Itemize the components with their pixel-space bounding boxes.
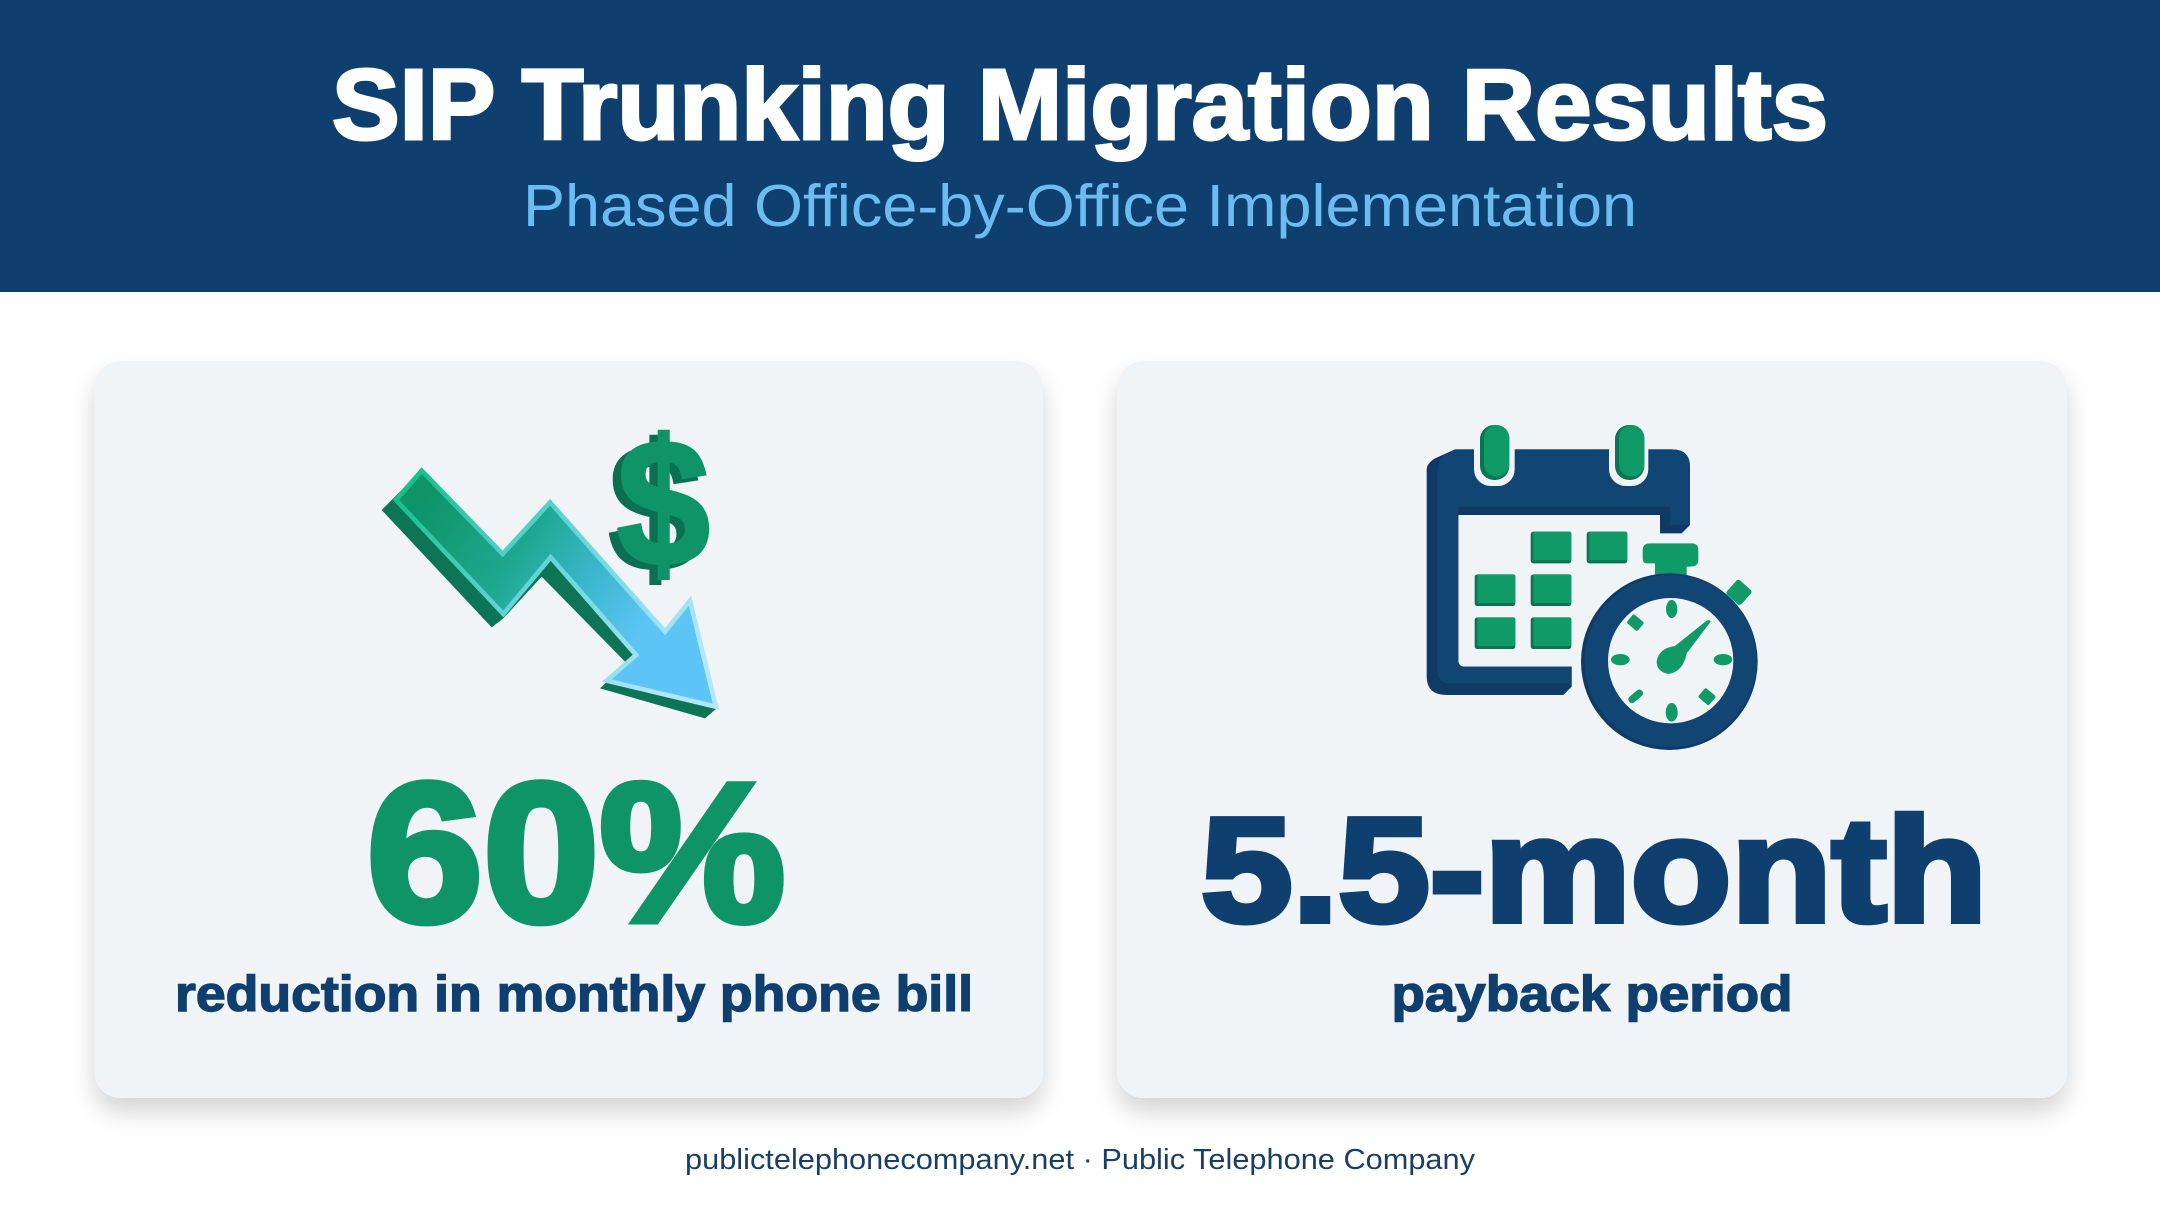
- header banner: [0, 0, 2160, 292]
- card background right: [1117, 361, 2067, 1098]
- panel: payback period: [1117, 361, 2067, 1098]
- icon: falling arrow with dollar sign: [382, 403, 717, 718]
- footer attribution: publictelephonecompany.net · Public Telephone Company: [685, 1144, 1476, 1176]
- panel: cost reduction: [94, 361, 1043, 1098]
- label: payback period: payback period: [1392, 966, 1792, 1022]
- subtitle: Phased Office-by-Office Implementation: [523, 173, 1637, 239]
- title: SIP Trunking Migration Results: [332, 49, 1828, 161]
- card background left: [94, 361, 1043, 1098]
- big number: 5.5-month: 5.5-month: [1201, 788, 1987, 953]
- icon: falling arrow with dollar sign: $: [608, 408, 702, 609]
- icon: calendar and stopwatch: [1427, 417, 1758, 750]
- big number: 60%: 60%: [366, 742, 786, 963]
- icon: falling arrow with dollar sign: $: [617, 403, 710, 604]
- label: reduction: reduction in monthly phone bill: [175, 966, 973, 1022]
